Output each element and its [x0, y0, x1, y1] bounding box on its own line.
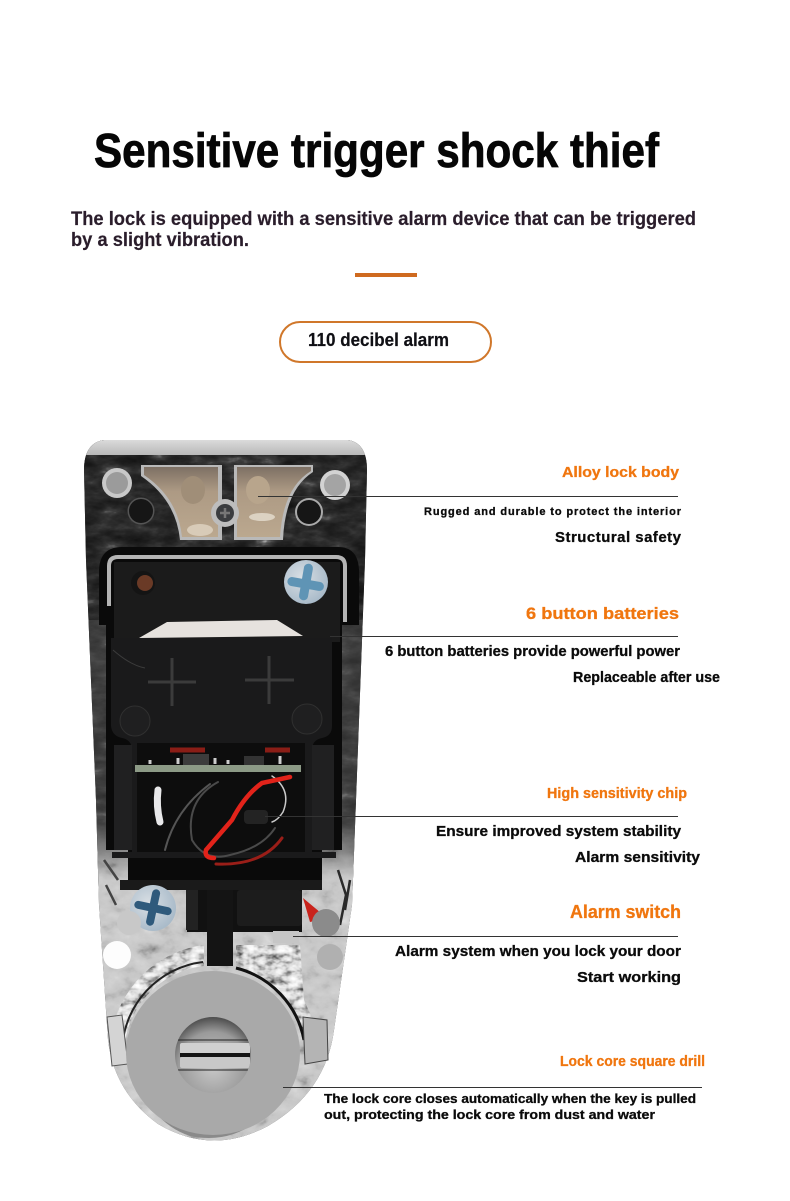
callout: 6 button batteries: Replaceable after use — [573, 670, 720, 686]
white insulation paper — [139, 620, 303, 638]
open chip cavity — [137, 743, 305, 852]
lock body plate — [80, 436, 372, 1156]
callout: lock core square drill — [283, 1054, 705, 1122]
brass battery contact recess — [141, 465, 313, 540]
threaded rod — [207, 890, 233, 966]
badge: 110 decibel alarm: 110 decibel alarm — [308, 330, 449, 350]
badge: 110 decibel alarm — [280, 322, 491, 362]
callout: high sensitivity chip — [265, 786, 700, 866]
callout: high sensitivity chip: Alarm sensitivity — [575, 850, 700, 866]
callout: lock core square drill: The lock core closes automatically when the key is pulled — [324, 1091, 696, 1106]
callout: alloy lock body — [258, 464, 682, 546]
red wire at switch — [303, 898, 327, 922]
circuit board — [135, 754, 301, 772]
collar tabs — [107, 1015, 328, 1066]
red leads behind the board — [170, 748, 290, 752]
callout: lock core square drill: Lock core square drill — [560, 1054, 705, 1070]
keyway — [175, 1017, 251, 1084]
callout: 6 button batteries: 6 button batteries provide powerful power — [385, 644, 680, 660]
callout: alarm switch: Alarm system when you lock your door — [395, 944, 681, 960]
callout: 6 button batteries — [330, 604, 720, 686]
orange divider — [355, 273, 417, 277]
blue-silver phillips screw — [284, 560, 328, 604]
lower rivets and holes — [103, 909, 343, 970]
blue screw, lower left — [130, 885, 176, 931]
battery compartment recess — [99, 547, 359, 880]
callout: high sensitivity chip: Ensure improved system stability — [436, 824, 681, 840]
callout: alloy lock body: Rugged and durable to protect the interior — [424, 506, 682, 518]
callout: alarm switch: Alarm switch — [570, 902, 681, 922]
intro text: by a slight vibration. — [71, 229, 249, 251]
callout: alloy lock body: Alloy lock body — [562, 464, 680, 481]
black switch housing — [120, 880, 322, 932]
grey cylinder face — [126, 971, 300, 1135]
corner rivets and mounting holes — [102, 468, 350, 526]
callout: alarm switch — [293, 902, 681, 986]
intro text: The lock is equipped with a sensitive alarm device that can be triggered — [71, 208, 696, 230]
wires — [157, 776, 290, 864]
centre screw — [211, 499, 239, 527]
callout: high sensitivity chip: High sensitivity chip — [547, 786, 687, 802]
title: Sensitive trigger shock thief — [94, 125, 660, 178]
alarm switch contact tab — [273, 931, 299, 943]
callout: 6 button batteries: 6 button batteries — [526, 604, 679, 623]
callout: lock core square drill: out, protecting the lock core from dust and water — [324, 1107, 655, 1122]
battery cover — [111, 638, 336, 858]
callout: alloy lock body: Structural safety — [555, 529, 682, 546]
callout: alarm switch: Start working — [577, 970, 681, 986]
rusted screw hole — [131, 571, 155, 595]
chrome cylinder collar — [110, 945, 322, 1138]
product photo: open lock body — [80, 436, 372, 1156]
